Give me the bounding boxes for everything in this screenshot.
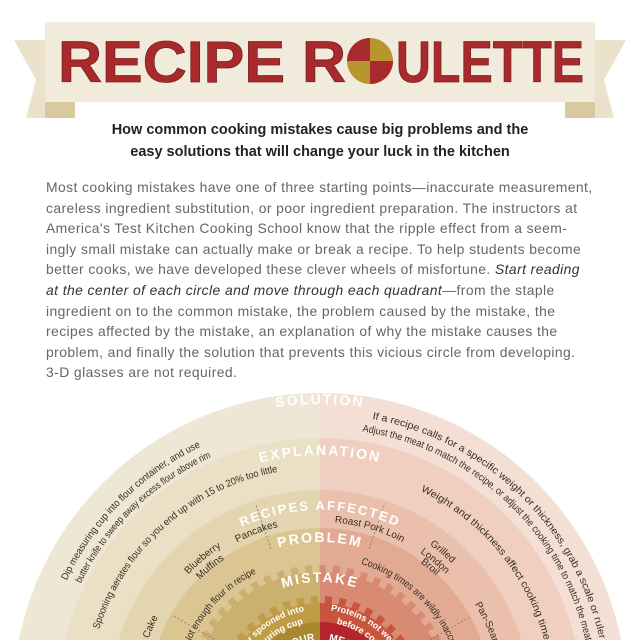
- intro paragraph: ingredient on to the common mistake, the problem caused by the mistake, the: [46, 303, 555, 319]
- solution: flour: Dip measuring cup into flour container, and use: [60, 442, 200, 580]
- intro paragraph: problem, and finally the solution that prevents this vicious circle from developing.: [46, 344, 575, 360]
- quadrant texts: Cake: [143, 616, 158, 638]
- right half rings (meat): [320, 393, 621, 640]
- intro paragraph: Most cooking mistakes have one of three starting points—inaccurate measurement,: [46, 179, 593, 195]
- subtitle: [112, 122, 528, 160]
- quadrant texts: Weight and thickness affect cooking time: [422, 484, 549, 640]
- ring labels: RECIPES AFFECTED: [239, 501, 398, 526]
- ribbon right tail: [565, 40, 626, 118]
- quadrant texts: Muffins: [196, 556, 224, 580]
- ring labels: SOLUTION: [276, 394, 362, 407]
- intro paragraph: 3-D glasses are not required.: [46, 364, 237, 380]
- quadrant texts: London: [420, 548, 448, 574]
- ring labels: EXPLANATION: [258, 445, 380, 462]
- quadrant texts: Grilled: [431, 540, 456, 563]
- intro paragraph: recipes affected by the mistake, an explanation of why the mistake causes the: [46, 323, 558, 339]
- intro paragraph: America's Test Kitchen Cooking School know that the ripple effect from a seem-: [46, 220, 567, 236]
- recipes affected: Pancakes: [234, 522, 278, 542]
- ring labels: PROBLEM: [277, 532, 361, 548]
- quadrant texts: Blueberry: [184, 542, 220, 574]
- intro paragraph: [46, 179, 593, 380]
- wheel chart: [19, 393, 621, 640]
- title banner: ULETTE: [396, 30, 584, 95]
- dashed dividers: [172, 503, 470, 640]
- intro paragraph: better cooks, we have developed these clever wheels of misfortune. Start reading: [46, 261, 580, 277]
- quadrant texts: Adjust the meat to match the recipe, or adjust the cooking time to match the meat: [362, 425, 592, 640]
- mistake texts: [246, 604, 395, 640]
- quadrant texts: [60, 412, 605, 640]
- ring labels: MISTAKE: [281, 572, 358, 588]
- left half rings (flour): [19, 393, 320, 640]
- intro paragraph: ingly small mistake can actually make or break a recipe. To help students become: [46, 241, 581, 257]
- quadrant texts: Roast Pork Loin: [335, 516, 404, 542]
- icon: roulette O: [347, 38, 393, 84]
- ribbon left tail: [14, 40, 75, 118]
- intro paragraph: at the center of each circle and move through each quadrant—from the staple: [46, 282, 555, 298]
- title text: RECIPE R: [58, 30, 346, 95]
- solution: meat: If a recipe calls for a specific weight or thickness, grab a scale or ruler: [373, 412, 605, 638]
- subtitle: How common cooking mistakes cause big problems and the: [112, 122, 528, 138]
- explanation: Spooning aerates flour so you end up with 15 to 20% too little: [93, 466, 277, 629]
- intro paragraph: careless ingredient substitution, or poor ingredient preparation. The instructors at: [46, 200, 578, 216]
- quadrant texts: Broil: [421, 558, 440, 576]
- title banner: [14, 22, 626, 118]
- quadrant texts: butter knife to sweep away excess flour above rim: [74, 453, 210, 583]
- subtitle: easy solutions that will change your luck in the kitchen: [130, 144, 510, 160]
- ring labels: [239, 394, 398, 588]
